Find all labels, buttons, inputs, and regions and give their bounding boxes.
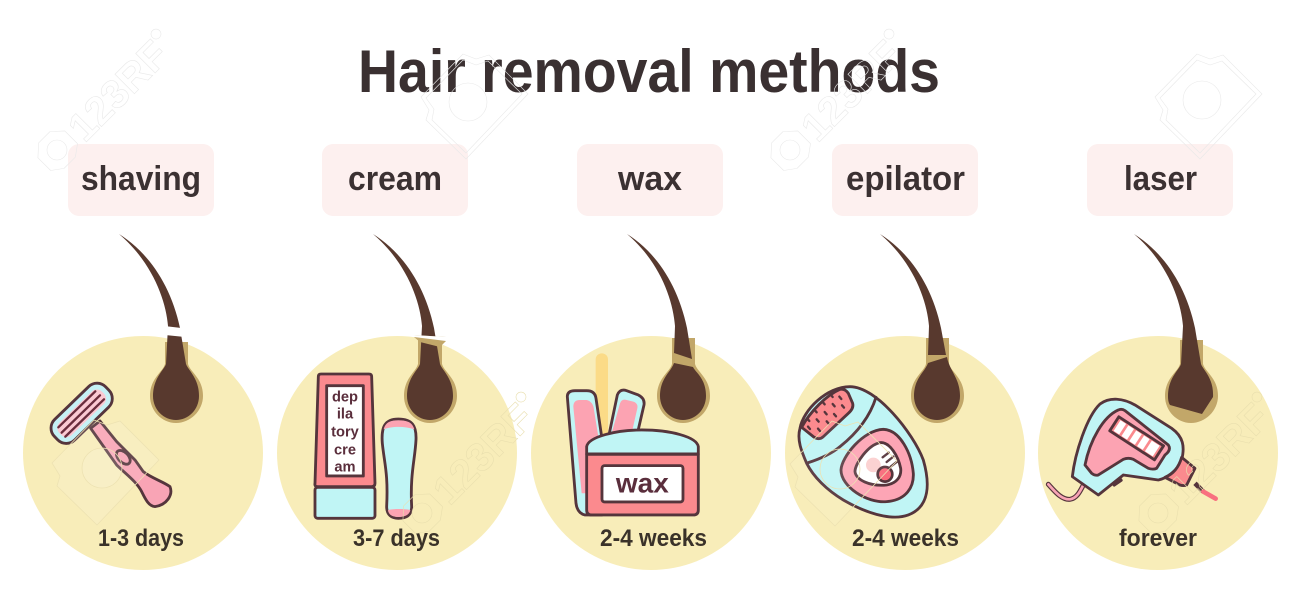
panel: cream: [277, 144, 517, 570]
label: cream: cream: [348, 160, 442, 198]
label: laser: laser: [1124, 160, 1197, 198]
title: Hair removal methods: [358, 38, 940, 105]
label: wax: wax: [617, 160, 682, 198]
hair: cut at the surface: [119, 234, 203, 423]
hair: root destroyed by laser: [1134, 234, 1218, 423]
label: shaving: shaving: [81, 160, 201, 198]
watermarks: 123RF: [60, 33, 177, 150]
icon: depilatory cream tubes: ila: [337, 407, 354, 423]
hair: dissolved at the surface: [373, 234, 457, 423]
skin circle: [1038, 336, 1278, 570]
duration: 2-4 weeks: 2-4 weeks: [852, 525, 959, 552]
panel: epilator: [785, 144, 1025, 570]
panel: wax: [531, 144, 771, 570]
duration: 1-3 days: 1-3 days: [98, 525, 184, 552]
skin circle: [23, 336, 263, 570]
label: cream: [322, 144, 468, 216]
icon: depilatory cream tubes: tory: [331, 425, 360, 441]
icon: wax jar, strips and spatula: wax: [615, 468, 669, 499]
hair: pulled from the root: [880, 234, 964, 423]
icon: epilator: [799, 387, 927, 517]
label: wax: [577, 144, 723, 216]
label: laser: [1087, 144, 1233, 216]
icon: wax jar, strips and spatula: [567, 353, 698, 515]
watermarks: 123RF: [793, 33, 910, 150]
icon: depilatory cream tubes: am: [334, 460, 356, 476]
icon: laser device: [1048, 399, 1216, 499]
icon: depilatory cream tubes: cre: [334, 442, 356, 458]
skin circle: [531, 336, 771, 570]
label: epilator: [832, 144, 978, 216]
watermarks: 123RF: [1161, 396, 1278, 513]
hair: pulled from the root: [627, 234, 710, 423]
panel: shaving: [23, 144, 263, 570]
label: shaving: [68, 144, 214, 216]
duration: 3-7 days: 3-7 days: [353, 525, 440, 552]
duration: 2-4 weeks: 2-4 weeks: [600, 525, 707, 552]
panel: laser: [1038, 144, 1278, 570]
icon: depilatory cream tubes: dep: [332, 390, 358, 406]
duration: forever: forever: [1119, 525, 1197, 552]
watermarks: 123RF: [425, 396, 542, 513]
icon: depilatory cream tubes: [315, 374, 416, 518]
label: epilator: epilator: [846, 160, 965, 198]
skin circle: [277, 336, 517, 570]
skin circle: [785, 336, 1025, 570]
icon: razor: [46, 378, 171, 507]
